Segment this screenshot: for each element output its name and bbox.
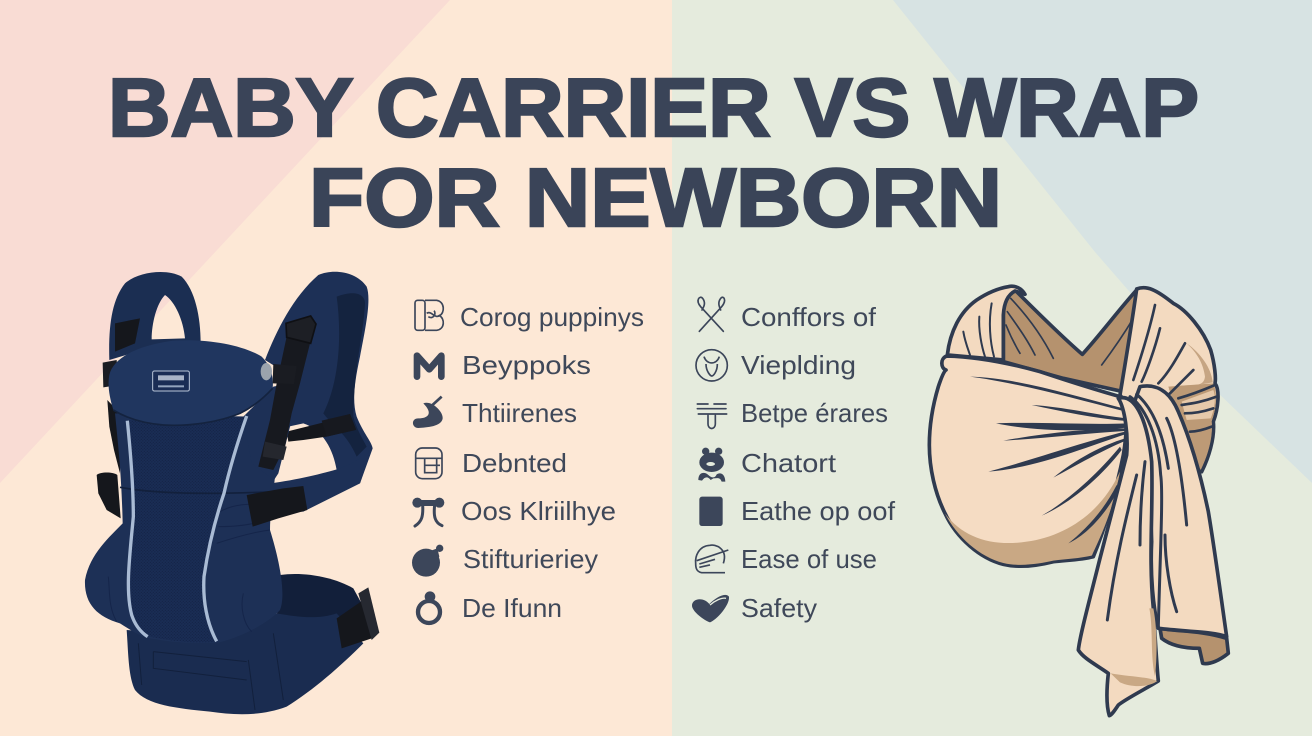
icons: wrap features	[692, 297, 729, 622]
hip belt back	[277, 574, 363, 622]
icons: carrier features	[412, 300, 444, 623]
icon: bulb	[412, 545, 443, 577]
tail left panel	[1078, 398, 1158, 716]
icon: rectangle	[699, 497, 723, 526]
left shoulder strap	[109, 272, 201, 360]
icon: rounded pouch	[415, 300, 443, 330]
strap buckle	[322, 414, 356, 437]
hip belt	[127, 613, 363, 714]
labels: carrier features: Debnted	[462, 448, 567, 478]
main body	[85, 413, 282, 643]
right shoulder strap	[265, 272, 373, 483]
right shoulder fabric	[1120, 288, 1218, 472]
labels: carrier features: Corog puppinys	[460, 302, 644, 332]
left side strap	[107, 400, 120, 473]
body lower shade and folds	[108, 504, 270, 632]
fold highlight	[1182, 390, 1215, 420]
left waist buckle	[97, 472, 121, 518]
icon: ring	[418, 591, 440, 623]
list: carrier features	[412, 300, 644, 623]
labels: wrap features: Conffors of	[741, 302, 877, 332]
icon: M	[417, 356, 441, 377]
tail end shade	[1111, 673, 1157, 686]
flap snap	[261, 363, 272, 380]
tail right panel	[1133, 386, 1227, 637]
labels: wrap features: Safety	[741, 593, 817, 623]
flap clip	[273, 364, 297, 384]
right lower shade	[1168, 383, 1216, 470]
icon: stool	[412, 498, 444, 526]
left side buckle	[103, 360, 118, 387]
illustration: baby carrier	[85, 272, 379, 714]
head flap	[109, 340, 273, 425]
icon: backpack	[416, 448, 442, 479]
right shoulder pleats	[1133, 305, 1217, 432]
title: BABY CARRIER VS WRAP	[108, 61, 1199, 154]
labels: carrier features: Oos Klriilhye	[461, 496, 616, 526]
inner back fabric	[1003, 290, 1137, 392]
labels: wrap features: Eathe op oof	[741, 496, 896, 526]
illustration: baby wrap	[929, 286, 1228, 716]
labels: carrier features: De Ifunn	[462, 593, 562, 623]
side panel beside webbing	[243, 383, 293, 480]
right strap padding shade	[323, 293, 367, 457]
inner pleats	[1006, 298, 1133, 365]
right shoulder crescent shade	[1168, 343, 1213, 390]
waist strap	[267, 448, 372, 513]
left shoulder fabric	[947, 286, 1025, 360]
labels: wrap features: Chatort	[741, 448, 837, 478]
flap label	[153, 371, 189, 391]
title: FOR NEWBORN	[309, 151, 1002, 244]
icon: bear	[698, 448, 725, 482]
labels: wrap features: Ease of use	[741, 544, 877, 574]
left shoulder pleats	[963, 303, 994, 357]
centre waist buckle	[247, 486, 307, 527]
tail inner shade	[1149, 608, 1157, 677]
labels: carrier features	[460, 302, 644, 623]
flap lower edge	[113, 388, 273, 425]
hip buckle	[337, 587, 379, 648]
list: wrap features	[692, 297, 896, 623]
chest strap	[287, 414, 356, 442]
right webbing	[258, 337, 310, 470]
lower webbing slider	[263, 442, 287, 460]
pouch lower shade	[945, 472, 1120, 565]
upper right slider	[286, 316, 316, 343]
labels: wrap features	[741, 302, 896, 623]
back tail shade	[1160, 628, 1228, 664]
icon: crossed loops	[698, 297, 725, 331]
icon: lines and hook	[697, 404, 727, 428]
icon: globe helmet	[696, 545, 728, 573]
left shoulder webbing	[115, 318, 140, 352]
labels: wrap features: Viepldіng	[741, 350, 856, 380]
labels: carrier features: Stifturieriey	[463, 544, 598, 574]
tail folds	[1107, 394, 1187, 627]
pouch pleats	[970, 377, 1127, 543]
mesh panel	[127, 417, 247, 642]
icon: heart	[692, 595, 729, 622]
piping	[127, 416, 247, 641]
icon: boot	[413, 397, 443, 428]
hip belt seams	[138, 633, 283, 710]
icon: circle emblem	[696, 350, 727, 381]
labels: carrier features: Thtiirenes	[462, 398, 577, 428]
labels: carrier features: Beyppoks	[462, 350, 591, 380]
title	[108, 61, 1199, 244]
front pouch	[929, 356, 1126, 566]
labels: wrap features: Betpe érares	[741, 398, 888, 428]
mesh seam	[120, 487, 273, 493]
